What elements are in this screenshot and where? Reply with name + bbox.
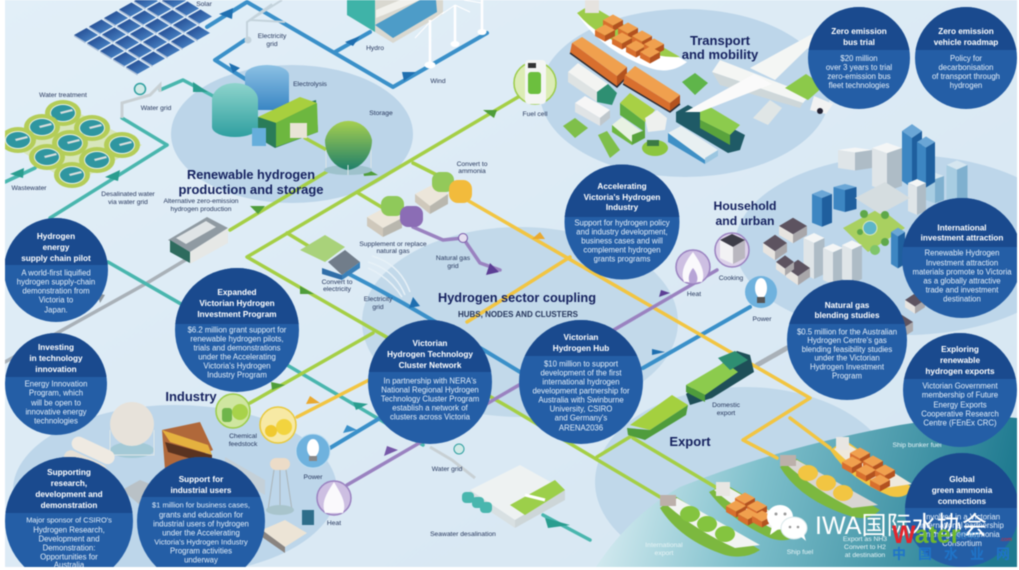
icon: chemical feedstock yellow <box>260 407 296 443</box>
callout: global green ammonia connections: in the green ammonia <box>924 530 1000 539</box>
small labels: International <box>645 542 683 549</box>
callout: supporting research, development and demonstration: Major sponsor of CSIRO's <box>26 516 112 524</box>
callout: zero emission bus trial <box>808 7 910 109</box>
callout: international investment attraction: trade and investment <box>926 286 999 294</box>
icon: heat flame industry <box>317 481 351 515</box>
callout: accelerating Victoria's hydrogen industry: Victoria's Hydrogen <box>584 193 660 202</box>
icon: chemical feedstock green <box>216 394 250 428</box>
callout: zero emission bus trial: Zero emission <box>831 27 887 36</box>
callout: Victorian hydrogen technology cluster network: National Regional Hydrogen <box>381 386 479 394</box>
small labels: via water grid <box>108 199 148 206</box>
callout: support for industrial users: under the Accelerating <box>162 528 240 538</box>
callout: hydrogen energy supply chain pilot: demonstration from <box>22 286 90 296</box>
callout: Victorian hydrogen technology cluster network: Hydrogen Technology <box>387 350 473 359</box>
icon: green locomotive <box>676 105 745 153</box>
callout: natural gas blending studies: Program <box>832 372 862 380</box>
callout: expanded Victorian hydrogen investment program <box>175 268 299 392</box>
callout: zero emission bus trial: zero-emission bus <box>827 72 891 81</box>
icon: houses <box>763 218 925 339</box>
callout: expanded Victorian hydrogen investment program: renewable hydrogen pilots, <box>190 334 284 344</box>
callout: support for industrial users: $1 million for business cases, <box>152 500 250 510</box>
callout: Victorian hydrogen hub: and Germany's <box>555 414 607 422</box>
pipe network: yellow ammonia <box>297 200 830 458</box>
heading: renewable hydrogen <box>178 167 324 197</box>
pipe network: grey <box>5 259 787 365</box>
small labels: Hydro <box>366 45 384 52</box>
callout: hydrogen energy supply chain pilot: hydrogen supply-chain <box>17 278 95 286</box>
small labels: Heat <box>327 520 341 527</box>
callout: supporting research, development and demonstration: Development and <box>38 534 100 544</box>
callout: supporting research, development and demonstration: research, <box>51 479 87 488</box>
callout: zero emission bus trial: $20 million <box>840 54 878 63</box>
small labels: Wastewater <box>11 185 47 192</box>
watermark: water site logo <box>892 521 1012 562</box>
callout: hydrogen energy supply chain pilot <box>4 218 108 322</box>
heading: household and urban <box>714 199 776 228</box>
callout: exploring renewable hydrogen exports: Centre (FEnEx CRC) <box>923 418 997 428</box>
callout: accelerating Victoria's hydrogen industry: Support for hydrogen policy <box>574 218 670 228</box>
icon: power bulb household <box>745 276 777 308</box>
callout: support for industrial users: Support for <box>179 475 224 484</box>
callout: investing in technology innovation <box>5 333 107 435</box>
heading: hydrogen sector coupling: Hydrogen sector coupling <box>438 290 596 305</box>
small labels: Electrolysis <box>293 81 328 88</box>
callout: international investment attraction: International <box>937 224 987 232</box>
icon: ship export ammonia <box>780 455 880 518</box>
callout: natural gas blending studies: blending feasibility studies <box>802 345 892 354</box>
callout: natural gas blending studies: Hydrogen Centre's gas <box>807 336 887 345</box>
callout: Victorian hydrogen hub: development partnership for <box>532 386 630 396</box>
callout: global green ammonia connections: international partnership <box>920 521 1004 530</box>
callout: investing in technology innovation: in technology <box>29 354 83 363</box>
callout: Victorian hydrogen technology cluster network: Victorian <box>413 339 447 348</box>
callout: accelerating Victoria's hydrogen industry: Accelerating <box>597 182 647 191</box>
callout: investing in technology innovation: will be open to <box>30 398 82 408</box>
callout: support for industrial users: grants and education for <box>159 510 243 520</box>
icon: water treatment ponds <box>0 100 142 188</box>
callout: zero emission vehicle roadmap <box>915 7 1017 109</box>
small labels: Desalinated water <box>101 191 156 198</box>
callout: investing in technology innovation: Program, which <box>29 388 83 398</box>
callout: expanded Victorian hydrogen investment program: trials and demonstrations <box>193 344 281 352</box>
callout: exploring renewable hydrogen exports: hydrogen exports <box>925 367 995 376</box>
icon: hydro dam <box>347 0 443 43</box>
heading: household and urban: Household <box>714 199 776 213</box>
callout: supporting research, development and demonstration: demonstration <box>41 501 97 510</box>
callout: exploring renewable hydrogen exports: renewable <box>940 356 980 365</box>
callout: hydrogen energy supply chain pilot: energy <box>43 243 70 252</box>
small labels: natural gas <box>376 248 410 255</box>
small labels: Convert to H2 <box>844 544 886 551</box>
icon: orange freight trains <box>570 37 680 112</box>
icon: convert to electricity <box>300 235 360 280</box>
callout: global green ammonia connections: green ammonia <box>932 486 993 495</box>
callout: Victorian hydrogen hub: international hydrogen <box>542 378 620 386</box>
callout: supporting research, development and demonstration: Supporting <box>47 468 91 477</box>
sea <box>596 417 1017 567</box>
icon: ship fuel containers <box>709 482 803 540</box>
heading: transport and mobility: and mobility <box>682 47 759 62</box>
small labels: Domestic <box>712 402 741 409</box>
callout: zero emission vehicle roadmap: decarbonisation <box>938 63 994 72</box>
small labels: grid <box>266 41 278 48</box>
callout: international investment attraction <box>902 198 1019 318</box>
callout: Victorian hydrogen hub: Hydrogen Hub <box>553 344 609 353</box>
small labels: Cooking <box>719 275 744 282</box>
small labels: Heat <box>687 291 701 298</box>
callout: global green ammonia connections <box>905 453 1019 567</box>
icon: fuel cell <box>514 60 556 104</box>
callout: Victorian hydrogen hub: Australia with Swinburne <box>538 396 624 404</box>
panel: transport area <box>540 9 830 177</box>
icon: aircraft and stairs <box>685 34 833 125</box>
watermark: water site logo: Water <box>892 521 961 549</box>
icon: industry plant <box>62 402 314 553</box>
callout: supporting research, development and demonstration: development and <box>35 490 103 499</box>
icon: road vehicles <box>563 63 718 164</box>
small labels: grid <box>447 263 459 270</box>
callout: hydrogen energy supply chain pilot: Hydrogen <box>37 232 75 241</box>
callout: Victorian hydrogen hub: ARENA2036 <box>559 424 603 432</box>
callout: supporting research, development and demonstration: Hydrogen Research, <box>33 526 105 534</box>
callout: zero emission bus trial: fleet technologies <box>829 81 889 90</box>
callout: investing in technology innovation: Investing <box>38 343 74 352</box>
small labels: Wind <box>430 78 446 85</box>
heading: industry: Industry <box>165 389 217 404</box>
callout: exploring renewable hydrogen exports: Cooperative Research <box>921 410 999 418</box>
callout: hydrogen energy supply chain pilot: Japan. <box>44 306 68 314</box>
callout: expanded Victorian hydrogen investment program: Victoria's Hydrogen <box>203 362 271 370</box>
callout: natural gas blending studies: $0.5 million for the Australian <box>797 328 897 336</box>
small labels: Chemical <box>229 433 257 440</box>
callout: global green ammonia connections: Global <box>949 475 975 484</box>
callout: investing in technology innovation: innovation <box>35 365 77 374</box>
callout: support for industrial users: industrial users <box>171 486 232 495</box>
panel: industry area <box>13 405 337 570</box>
small labels: ammonia <box>458 168 486 175</box>
icon: convert to ammonia <box>415 172 472 214</box>
callout: Victorian hydrogen hub: development of the first <box>540 368 622 378</box>
callout: global green ammonia connections: Consortium <box>942 539 982 548</box>
icon: ship bunker fuel containers <box>830 437 913 497</box>
callout: international investment attraction: investment attraction <box>921 234 1003 242</box>
icon: transport ship <box>577 0 687 70</box>
watermark: water site logo: 中 国 水 业 网 <box>892 546 1010 562</box>
callout: supporting research, development and demonstration: Demonstration: <box>43 544 95 552</box>
small labels: Electricity <box>364 296 393 303</box>
callout: accelerating Victoria's hydrogen industry: complement hydrogen <box>583 246 661 254</box>
pipe network: purple gas <box>347 227 717 485</box>
callout: zero emission vehicle roadmap: of transport through <box>932 72 1000 81</box>
small labels: Electricity <box>258 33 287 40</box>
callout: zero emission bus trial: bus trial <box>843 38 875 47</box>
watermark: water site logo: 8848 <box>955 530 980 542</box>
callout: Victorian hydrogen technology cluster network: clusters across Victoria <box>390 412 471 422</box>
heading: transport and mobility: Transport <box>690 33 751 48</box>
callout: exploring renewable hydrogen exports <box>903 333 1017 447</box>
callout: natural gas blending studies: Natural gas <box>825 301 870 310</box>
pipe network: teal water <box>5 80 590 540</box>
callout: hydrogen energy supply chain pilot: Victoria to <box>39 296 74 304</box>
icon: supplement natural gas <box>367 196 423 237</box>
small labels: Water grid <box>432 466 463 473</box>
callout: zero emission vehicle roadmap: vehicle roadmap <box>934 38 998 47</box>
callout: Victorian hydrogen technology cluster network: In partnership with NERA's <box>384 376 477 386</box>
callout: expanded Victorian hydrogen investment program: Investment Program <box>197 310 277 319</box>
small labels: Power <box>304 474 323 481</box>
callout: global green ammonia connections: connections <box>938 497 987 506</box>
callout: expanded Victorian hydrogen investment program: Victorian Hydrogen <box>199 299 275 308</box>
callout: expanded Victorian hydrogen investment program: $6.2 million grant support for <box>188 326 287 334</box>
callout: exploring renewable hydrogen exports: Exploring <box>941 345 979 354</box>
small labels: grid <box>372 304 384 311</box>
small labels: Water treatment <box>39 92 87 99</box>
watermark: IWA: IWA国际水协会 <box>815 512 987 540</box>
callout: Victorian hydrogen technology cluster network <box>368 320 492 444</box>
icon: solar farm <box>74 0 212 76</box>
callout: supporting research, development and demonstration <box>5 457 133 570</box>
heading: renewable hydrogen: production and storage <box>178 182 324 197</box>
icon: heat flame household <box>676 250 710 284</box>
small labels: hydrogen production <box>171 206 232 213</box>
small labels: at destination <box>845 552 885 559</box>
small labels: export <box>655 550 674 557</box>
heading: renewable hydrogen: Renewable hydrogen <box>187 167 315 182</box>
icon: water grid gauge south <box>430 444 475 478</box>
small labels: Convert to <box>322 279 353 286</box>
callout: exploring renewable hydrogen exports: Energy Exports <box>933 400 987 410</box>
heading: export: Export <box>669 434 711 449</box>
callout: support for industrial users: underway <box>184 556 218 564</box>
callout: global green ammonia connections: Involved in a Victorian <box>924 512 1000 522</box>
callout: accelerating Victoria's hydrogen industry: business cases and will <box>581 236 663 246</box>
callout: expanded Victorian hydrogen investment program: under the Accelerating <box>198 352 276 362</box>
icon: electrolysis tanks <box>212 65 318 148</box>
icon: cooking <box>715 233 749 267</box>
callout: accelerating Victoria's hydrogen industry <box>564 164 680 280</box>
callout: supporting research, development and demonstration: Australia <box>54 560 85 570</box>
callout: support for industrial users: Program activities <box>170 546 232 556</box>
icon: ship international hydrogen <box>660 495 760 557</box>
callout: Victorian hydrogen hub: Victorian <box>564 333 598 342</box>
callout: international investment attraction: Investment attraction <box>926 258 998 268</box>
small labels: Fuel cell <box>523 111 548 118</box>
icon: gas gauge <box>458 234 468 242</box>
callout: hydrogen energy supply chain pilot: A world-first liquified <box>21 268 91 278</box>
small labels: feedstock <box>229 441 258 448</box>
icon: electricity grid wires <box>368 256 410 297</box>
callout: investing in technology innovation: innovative energy <box>25 408 87 416</box>
callout: supporting research, development and demonstration: Opportunities for <box>40 552 98 562</box>
callout: support for industrial users <box>137 457 265 570</box>
callout: zero emission vehicle roadmap: Policy for <box>950 54 982 63</box>
pipe network: blue electricity <box>207 2 750 448</box>
callout: accelerating Victoria's hydrogen industry: and industry development, <box>576 228 668 236</box>
callout: international investment attraction: materials promote to Victoria <box>912 268 1012 276</box>
callout: Victorian hydrogen hub: $10 million to support <box>544 360 619 368</box>
heading: household and urban: and urban <box>716 214 774 228</box>
callout: natural gas blending studies: Hydrogen Investment <box>810 362 885 372</box>
icon: WeChat watermark bubbles <box>767 505 807 541</box>
small labels: electricity <box>323 286 352 293</box>
icon: green freight train <box>627 351 754 440</box>
watermark: water site logo: .com <box>1000 537 1012 543</box>
icon: city towers <box>804 124 968 284</box>
callout: Victorian hydrogen technology cluster network: Technology Cluster Program <box>381 394 479 404</box>
callout: exploring renewable hydrogen exports: membership of Future <box>922 390 998 400</box>
pipe network: lime hydrogen <box>230 90 717 497</box>
heading: hydrogen sector coupling <box>438 290 596 319</box>
small labels: Power <box>753 316 772 323</box>
panel: export area <box>595 387 895 570</box>
callout: zero emission vehicle roadmap: Zero emission <box>938 27 994 36</box>
icon: water grid gauge <box>122 84 160 118</box>
callout: exploring renewable hydrogen exports: Victorian Government <box>922 382 998 390</box>
callout: international investment attraction: as a globally attractive <box>923 276 1001 286</box>
small labels: Natural gas <box>436 255 471 262</box>
callout: zero emission bus trial: over 3 years to trial <box>826 63 892 72</box>
panel: hydrogen hub area <box>362 227 678 417</box>
panel: renewable hydrogen area <box>171 65 413 203</box>
arrows <box>10 8 670 528</box>
small labels: Export as NH3 <box>843 536 887 543</box>
callout: expanded Victorian hydrogen investment program: Industry Program <box>207 370 267 380</box>
icon: desalination plant <box>462 465 565 528</box>
callout: investing in technology innovation: technologies <box>34 416 78 426</box>
small labels: Alternative zero-emission <box>163 198 239 205</box>
callout: Victorian hydrogen hub: University, CSIRO <box>550 404 612 414</box>
icon: storage sphere <box>324 121 372 175</box>
small labels: Convert to <box>457 161 488 168</box>
callout: support for industrial users: industrial users of hydrogen <box>153 520 249 528</box>
callout: Victorian hydrogen technology cluster network: establish a network of <box>392 404 469 412</box>
small labels: Solar <box>196 1 213 8</box>
small labels: Ship bunker fuel <box>892 442 942 449</box>
small labels: Water grid <box>141 105 172 112</box>
icon: alternative hydrogen building <box>168 217 228 264</box>
callout: Victorian hydrogen technology cluster network: Cluster Network <box>399 361 462 370</box>
callout: hydrogen energy supply chain pilot: supply chain pilot <box>21 254 91 263</box>
callout: expanded Victorian hydrogen investment program: Expanded <box>217 288 257 297</box>
heading: hydrogen sector coupling: HUBS, NODES AND CLUSTERS <box>458 309 578 319</box>
icon: electricity grid pylon <box>246 0 285 42</box>
icon: power bulb industry <box>296 434 330 468</box>
callout: natural gas blending studies: under the Victorian <box>814 354 880 362</box>
small labels: Ship fuel <box>787 549 814 556</box>
callout: Victorian hydrogen hub <box>519 320 643 444</box>
callout: accelerating Victoria's hydrogen industry: Industry <box>606 203 639 212</box>
callout: international investment attraction: Renewable Hydrogen <box>925 248 999 258</box>
small labels: export <box>717 410 735 417</box>
small labels: Supplement or replace <box>359 241 427 248</box>
small labels: Storage <box>369 110 393 117</box>
panel: household and urban area <box>735 155 1019 335</box>
callout: support for industrial users: Victoria's Hydrogen Industry <box>154 538 248 546</box>
icon: wind turbines <box>415 0 486 68</box>
callout: natural gas blending studies <box>787 280 907 400</box>
callout: accelerating Victoria's hydrogen industry: grants programs <box>594 254 650 264</box>
heading: transport and mobility <box>682 33 759 62</box>
callout: investing in technology innovation: Energy Innovation <box>25 380 87 388</box>
small labels: Seawater desalination <box>430 531 496 538</box>
callout: zero emission vehicle roadmap: hydrogen <box>950 81 982 90</box>
callout: international investment attraction: destination <box>943 294 981 304</box>
callout: natural gas blending studies: blending studies <box>814 311 880 320</box>
